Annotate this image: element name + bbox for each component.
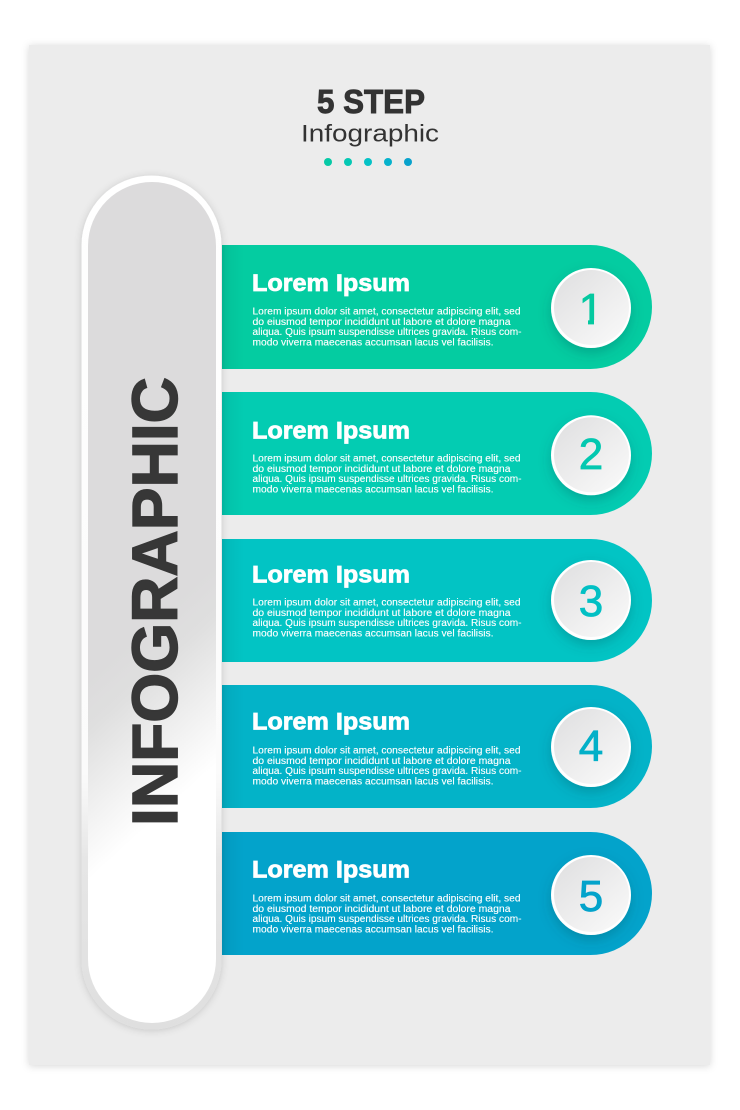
step 4 heading: Lorem Ipsum — [252, 708, 410, 736]
step 4 number badge — [551, 707, 631, 787]
step 2 heading: Lorem Ipsum — [252, 418, 410, 444]
step 5 heading: Lorem Ipsum — [252, 856, 410, 884]
step 5 body text: do eiusmod tempor incididunt ut labore et dolore magna — [252, 904, 511, 915]
vertical INFOGRAPHIC label: INFOGRAPHIC — [119, 377, 191, 826]
step 5 number badge — [551, 855, 631, 935]
title block — [301, 83, 439, 166]
step 2 body text: modo viverra maecenas accumsan lacus vel facilisis. — [252, 484, 494, 496]
step 1 body text: aliqua. Quis ipsum suspendisse ultrices gravida. Risus com- — [252, 327, 522, 338]
step 5 body text — [252, 894, 522, 936]
step 4 body text — [252, 746, 522, 788]
step 4 body text: Lorem ipsum dolor sit amet, consectetur adipiscing elit, sed — [252, 746, 520, 756]
step 2 body text — [252, 454, 522, 496]
step 3 body text: do eiusmod tempor incididunt ut labore et dolore magna — [252, 608, 511, 619]
step 3 body text: aliqua. Quis ipsum suspendisse ultrices gravida. Risus com- — [252, 618, 522, 629]
step 2 number badge: 2 — [579, 430, 603, 479]
step 1 body text — [252, 306, 522, 348]
step 4 body text: aliqua. Quis ipsum suspendisse ultrices gravida. Risus com- — [252, 766, 522, 777]
step 5 body text: aliqua. Quis ipsum suspendisse ultrices gravida. Risus com- — [252, 914, 522, 925]
step 1 number badge — [551, 268, 631, 348]
step 1 body text: modo viverra maecenas accumsan lacus vel facilisis. — [252, 338, 494, 348]
step 4 number badge: 4 — [579, 722, 603, 771]
step 1 body text: Lorem ipsum dolor sit amet, consectetur adipiscing elit, sed — [252, 306, 520, 318]
step 4 body text: do eiusmod tempor incididunt ut labore et dolore magna — [252, 756, 511, 767]
step 5 body text: Lorem ipsum dolor sit amet, consectetur adipiscing elit, sed — [252, 894, 520, 904]
five progress dots — [324, 158, 412, 166]
step 2 body text: aliqua. Quis ipsum suspendisse ultrices gravida. Risus com- — [252, 474, 522, 485]
step 3 number badge: 3 — [579, 577, 603, 626]
step 3 heading: Lorem Ipsum — [252, 562, 410, 588]
step 3 body text — [252, 598, 522, 640]
step 1 body text: do eiusmod tempor incididunt ut labore et dolore magna — [252, 317, 511, 328]
step 2 number badge — [551, 415, 631, 495]
step 2 body text: do eiusmod tempor incididunt ut labore et dolore magna — [252, 464, 511, 475]
vertical pill panel — [82, 176, 222, 1030]
step 4 banner — [222, 685, 652, 808]
subtitle: Infographic: Infographic — [301, 120, 439, 148]
step 3 body text: modo viverra maecenas accumsan lacus vel facilisis. — [252, 628, 494, 640]
step 2 body text: Lorem ipsum dolor sit amet, consectetur adipiscing elit, sed — [252, 454, 520, 464]
step 5 number badge: 5 — [579, 872, 603, 921]
step 1 banner — [222, 245, 652, 369]
step 1 heading: Lorem Ipsum — [252, 270, 410, 297]
step 1 number badge: 1 — [579, 285, 603, 334]
step 3 number badge — [551, 560, 631, 640]
step 3 body text: Lorem ipsum dolor sit amet, consectetur adipiscing elit, sed — [252, 598, 520, 608]
step 2 banner — [222, 392, 652, 515]
step 3 banner — [222, 539, 652, 662]
step 5 banner — [222, 832, 652, 955]
step 4 body text: modo viverra maecenas accumsan lacus vel facilisis. — [252, 776, 494, 788]
step 5 body text: modo viverra maecenas accumsan lacus vel facilisis. — [252, 924, 494, 936]
title: 5 STEP: 5 STEP — [317, 83, 425, 120]
